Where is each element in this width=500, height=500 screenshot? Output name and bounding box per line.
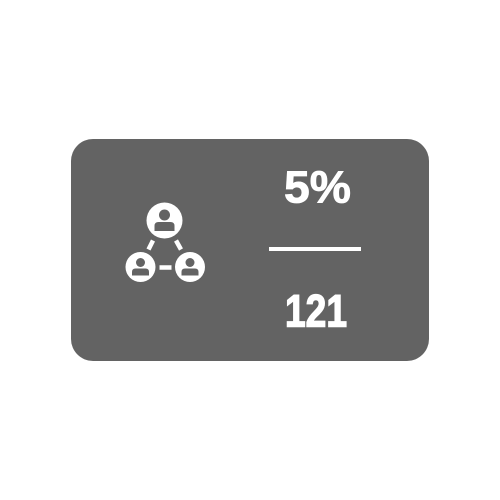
stat: percentage: 5%: [284, 162, 351, 212]
icon: three connected people: [126, 202, 205, 282]
stat: count: 121: [285, 286, 347, 336]
divider line: [269, 247, 361, 251]
panel: card background: [71, 139, 429, 361]
